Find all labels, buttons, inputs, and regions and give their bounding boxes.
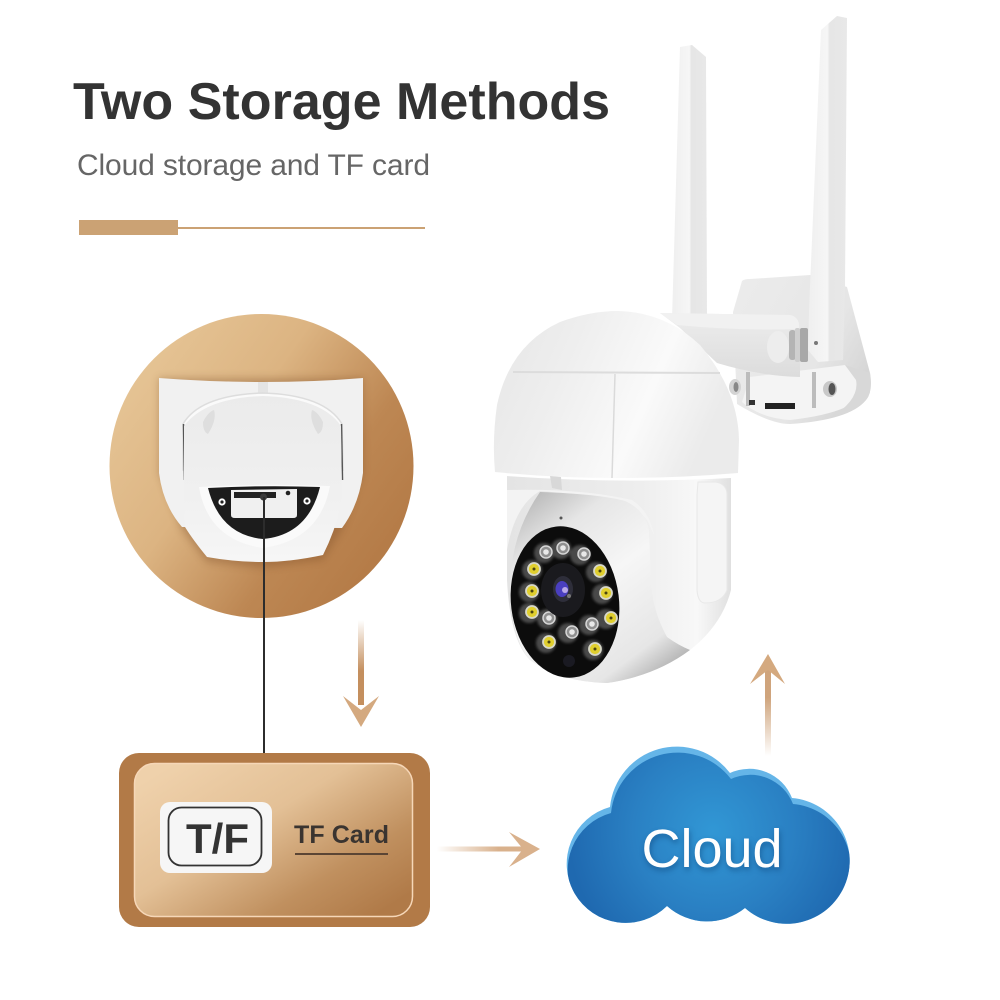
- SD slot panel: [208, 486, 320, 539]
- TF card label: TF Card: [294, 821, 389, 849]
- icon: cloud: [567, 747, 851, 930]
- arrow: slot down to TF card: [343, 620, 379, 727]
- icon: T/F badge: [160, 802, 272, 873]
- lens: [541, 563, 585, 617]
- arrow: TF card to cloud: [437, 832, 540, 867]
- LEDs white: [540, 542, 598, 638]
- dome: [494, 311, 739, 478]
- LEDs yellow: [526, 563, 617, 655]
- rotating head: [510, 492, 690, 683]
- title: Two Storage Methods: [73, 73, 610, 131]
- decorative heading rule: [79, 220, 425, 235]
- lower body shell: [507, 476, 731, 683]
- subtitle: Cloud storage and TF card: [77, 149, 430, 182]
- infographic canvas: [74, 16, 871, 927]
- cloud label: Cloud: [641, 819, 783, 879]
- arm: [660, 313, 800, 377]
- panel: TF card: [119, 753, 430, 927]
- icon: T/F badge: T/F: [186, 815, 249, 862]
- connector line from TF slot to TF card: [260, 494, 267, 753]
- camera: antennas and wall mount: [494, 16, 871, 684]
- panel: TF slot close-up: [110, 314, 414, 618]
- black lens face: [502, 520, 628, 684]
- wall mount plate: [733, 275, 871, 424]
- front antenna: [808, 16, 847, 362]
- IR sensor: [563, 655, 575, 667]
- wall bracket: [159, 378, 363, 528]
- back antenna: [672, 45, 707, 320]
- camera rear: [184, 396, 342, 562]
- LED halos: [519, 539, 616, 660]
- arrow: cloud up to camera: [750, 654, 785, 756]
